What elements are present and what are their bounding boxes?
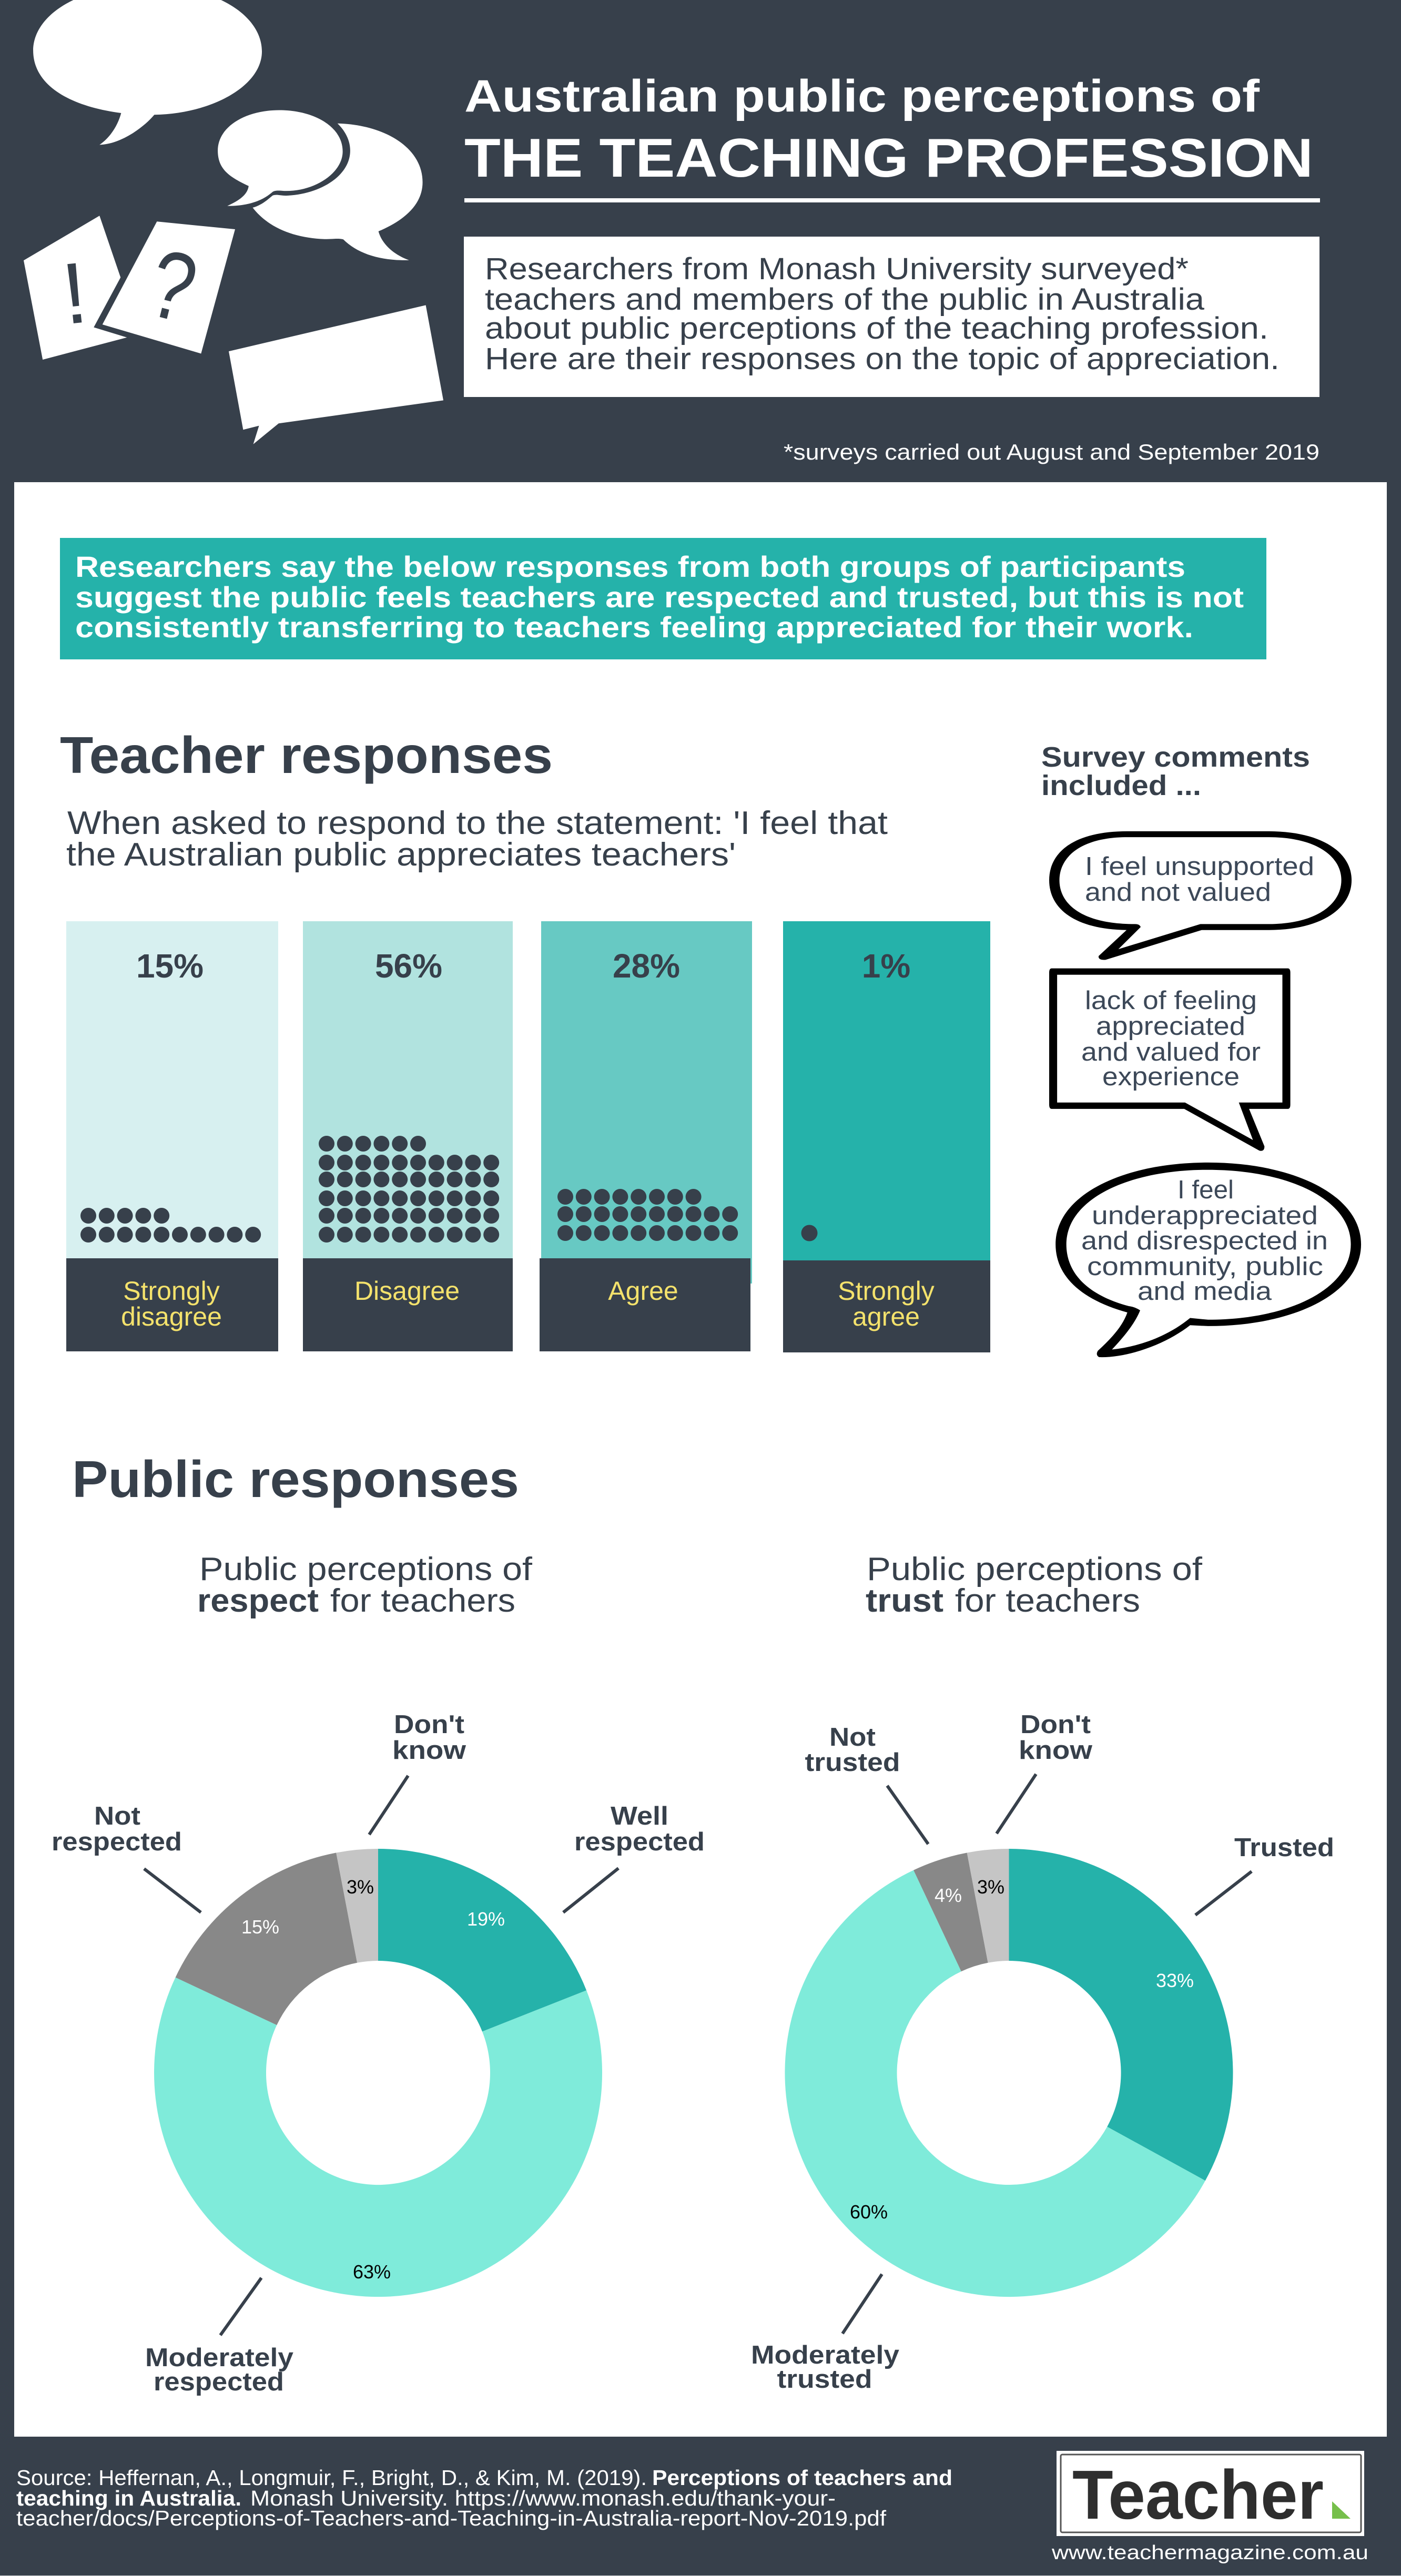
chart: trust donut: 33% <box>1156 1970 1194 1991</box>
panel: footer <box>16 2451 1368 2564</box>
chart: respect donut: respected <box>574 1828 705 1856</box>
subtitle: trust: for teachers <box>955 1583 1140 1619</box>
bar: strongly agree 1%: agree <box>852 1302 920 1331</box>
chart: trust donut: Moderately <box>751 2341 899 2369</box>
subtitle: respect <box>197 1551 533 1619</box>
icon: front speech bubble <box>218 110 343 206</box>
segment: don't know 3% <box>967 1849 1009 1963</box>
source citation: teaching in Australia. <box>16 2486 241 2510</box>
icon: question card: ? <box>139 229 207 344</box>
heading: public responses: Public responses <box>72 1450 519 1508</box>
segment: trusted 33% <box>1009 1849 1233 2181</box>
segment: not respected 15% <box>176 1853 357 2025</box>
speech bubble: underappreciated: and media <box>1138 1277 1272 1306</box>
subtitle: trust: trust <box>866 1583 943 1619</box>
chart: respect donut: 63% <box>353 2261 391 2283</box>
chart: respect donut: Moderately <box>145 2344 293 2372</box>
chart: respect donut: respected <box>52 1828 182 1856</box>
chart: trust donut <box>751 1710 1334 2394</box>
heading: survey comments: Survey comments <box>1041 741 1310 773</box>
bar: disagree 56%: 56% <box>375 947 442 985</box>
panel: header <box>24 0 1320 464</box>
chart: respect donut: 19% <box>467 1908 505 1930</box>
bar: disagree 56% <box>303 921 513 1351</box>
subtitle: respect: for teachers <box>330 1583 515 1619</box>
speech bubble: underappreciated: community, public <box>1087 1253 1323 1281</box>
chart: respect donut: 3% <box>347 1876 374 1898</box>
icons: speech bubbles and cards <box>24 0 443 444</box>
chart: trust donut: Don't <box>1020 1710 1091 1739</box>
statement text <box>66 805 888 873</box>
callout: researchers summary: consistently transferring to teachers feeling appreciated for their work. <box>75 610 1193 644</box>
title: THE TEACHING PROFESSION <box>464 128 1313 189</box>
chart: respect donut: know <box>392 1736 466 1765</box>
chart: respect donut: 15% <box>241 1916 279 1938</box>
speech bubble: lack of feeling appreciated: lack of feeling <box>1085 986 1257 1015</box>
bar: strongly agree 1% <box>783 921 990 1352</box>
chart: respect donut: Well <box>611 1802 668 1830</box>
icon: question card <box>103 221 235 353</box>
subtitle: trust <box>866 1551 1203 1619</box>
chart: respect donut: respected <box>154 2368 284 2396</box>
bar: strongly disagree 15%: Strongly <box>123 1276 220 1306</box>
icon: exclamation card: ! <box>58 243 92 342</box>
bar: disagree 56%: Disagree <box>354 1276 460 1306</box>
chart: respect donut: Not <box>94 1802 140 1830</box>
speech bubble: lack of feeling appreciated: experience <box>1102 1063 1240 1091</box>
speech bubble: lack of feeling appreciated: and valued for <box>1081 1038 1261 1066</box>
icon: rectangular speech bubble <box>229 305 443 444</box>
website: www.teachermagazine.com.au <box>1051 2542 1368 2564</box>
chart: trust donut: 3% <box>977 1876 1004 1898</box>
segment: moderately trusted 60% <box>785 1870 1205 2297</box>
callout: researchers summary <box>60 538 1266 659</box>
title <box>464 71 1313 189</box>
heading: teacher responses: Teacher responses <box>60 726 553 784</box>
bar: agree 28% <box>540 921 752 1351</box>
chart: trust donut: 4% <box>935 1885 962 1906</box>
chart: respect donut <box>52 1710 705 2396</box>
bar: agree 28%: 28% <box>613 947 680 985</box>
speech bubble: underappreciated <box>1055 1163 1361 1357</box>
chart: teacher response bars <box>66 921 990 1352</box>
speech bubble: underappreciated: underappreciated <box>1092 1202 1318 1230</box>
heading: survey comments <box>1041 741 1310 801</box>
intro text box: teachers and members of the public in Australia <box>485 282 1205 317</box>
intro text box: Researchers from Monash University surveyed* <box>485 252 1189 286</box>
callout: researchers summary: suggest the public feels teachers are respected and trusted, but this is not <box>75 581 1244 614</box>
segment: moderately respected 63% <box>154 1978 602 2297</box>
bar: agree 28%: Agree <box>608 1276 678 1306</box>
segment: not trusted 4% <box>913 1853 988 1971</box>
speech bubble: underappreciated: and disrespected in <box>1081 1227 1328 1255</box>
subtitle: trust: Public perceptions of <box>867 1551 1203 1587</box>
panel: main white panel <box>14 482 1387 2437</box>
icon: exclamation card <box>24 216 127 360</box>
callout: researchers summary: Researchers say the below responses from both groups of participants <box>75 550 1185 583</box>
chart: trust donut: trusted <box>805 1748 900 1777</box>
chart: trust donut: 60% <box>850 2201 888 2223</box>
logo: Teacher: Teacher <box>1072 2456 1324 2533</box>
intro text box: about public perceptions of the teaching profession. <box>485 311 1268 345</box>
chart: trust donut: know <box>1019 1736 1093 1765</box>
segment: don't know 3% <box>336 1849 378 1963</box>
title: Australian public perceptions of <box>464 71 1260 121</box>
chart: respect donut: Don't <box>394 1710 464 1739</box>
source citation: teacher/docs/Perceptions-of-Teachers-and-Teaching-in-Australia-report-Nov-2019.pdf <box>16 2506 887 2530</box>
speech bubble: unsupported <box>1049 831 1352 960</box>
bar: strongly disagree 15%: disagree <box>121 1302 222 1331</box>
chart: trust donut: Not <box>829 1723 876 1752</box>
subtitle: respect: respect <box>197 1583 319 1619</box>
statement text: the Australian public appreciates teachers' <box>66 837 736 873</box>
bar: strongly agree 1%: 1% <box>862 947 910 985</box>
speech bubble: underappreciated: I feel <box>1177 1176 1234 1204</box>
source citation <box>16 2466 952 2530</box>
speech bubble: lack of feeling appreciated: appreciated <box>1096 1012 1245 1041</box>
statement text: When asked to respond to the statement: 'I feel that <box>67 805 888 841</box>
source citation: Perceptions of teachers and <box>652 2466 952 2490</box>
heading: survey comments: included ... <box>1041 770 1201 801</box>
icon: rear speech bubble <box>252 124 423 260</box>
footnote: *surveys carried out August and September 2019 <box>784 440 1319 464</box>
icon: large speech bubble <box>33 0 262 145</box>
bar: strongly disagree 15%: 15% <box>136 947 204 985</box>
chart: trust donut: trusted <box>777 2365 872 2394</box>
intro text box <box>464 237 1319 397</box>
bar: strongly disagree 15% <box>66 921 278 1351</box>
speech bubble: lack of feeling appreciated <box>1049 969 1291 1151</box>
segment: well respected 19% <box>378 1849 586 2032</box>
subtitle: respect: Public perceptions of <box>199 1551 533 1587</box>
bar: strongly agree 1%: Strongly <box>838 1276 935 1306</box>
source citation: Monash University. https://www.monash.edu/thank-your- <box>250 2486 836 2510</box>
speech bubble: unsupported: and not valued <box>1085 878 1271 907</box>
intro text box: Here are their responses on the topic of appreciation. <box>485 342 1280 376</box>
source citation: Source: Heffernan, A., Longmuir, F., Bright, D., & Kim, M. (2019). <box>16 2466 647 2490</box>
chart: trust donut: Trusted <box>1234 1834 1334 1862</box>
speech bubble: unsupported: I feel unsupported <box>1085 852 1314 881</box>
